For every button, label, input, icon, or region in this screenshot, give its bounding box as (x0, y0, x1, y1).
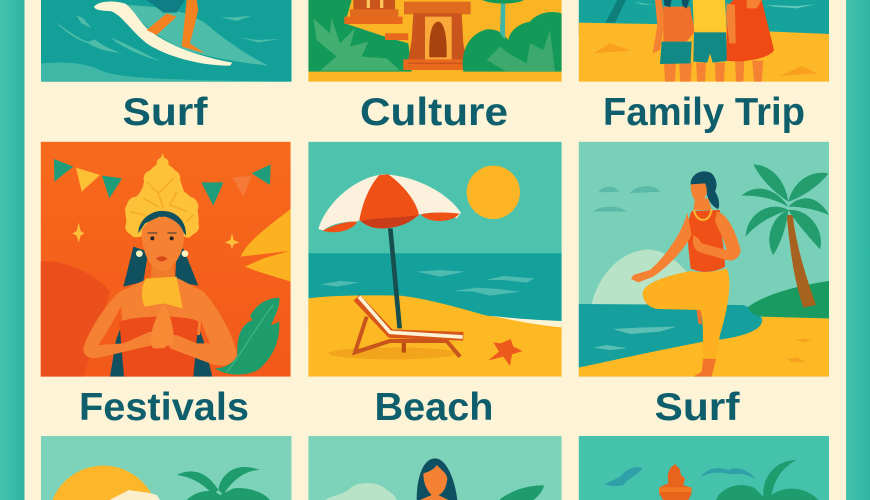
illustration: yoga on shore (579, 142, 829, 377)
panel: festivals (41, 142, 291, 377)
left teal border (0, 0, 24, 500)
label: Culture: Culture (360, 91, 508, 134)
illustration: woman and leaf (308, 436, 562, 500)
panel: beach (308, 142, 562, 377)
illustration: sun and palm (41, 436, 292, 500)
panel: bottom centre cropped (308, 436, 562, 500)
panel: surf yoga (579, 142, 829, 377)
label: Beach: Beach (374, 386, 494, 429)
label: Family Trip: Family Trip (603, 91, 805, 134)
illustration: temple (308, 0, 562, 82)
illustration: festival dancer (41, 142, 291, 377)
panel: family trip top (579, 0, 829, 82)
label: Surf second: Surf (654, 386, 741, 429)
label: Festivals: Festivals (79, 386, 249, 429)
illustration: beach umbrella (308, 142, 562, 377)
right teal border (846, 0, 870, 500)
panel: surf top (41, 0, 292, 82)
illustration: family on beach (579, 0, 829, 82)
panel: bottom left cropped (41, 436, 292, 500)
illustration: surfer (41, 0, 292, 82)
panel: bottom right cropped (579, 436, 829, 500)
panel: culture top (308, 0, 562, 82)
illustration: tower, birds and palm (579, 436, 829, 500)
label: Surf: Surf (122, 91, 209, 134)
